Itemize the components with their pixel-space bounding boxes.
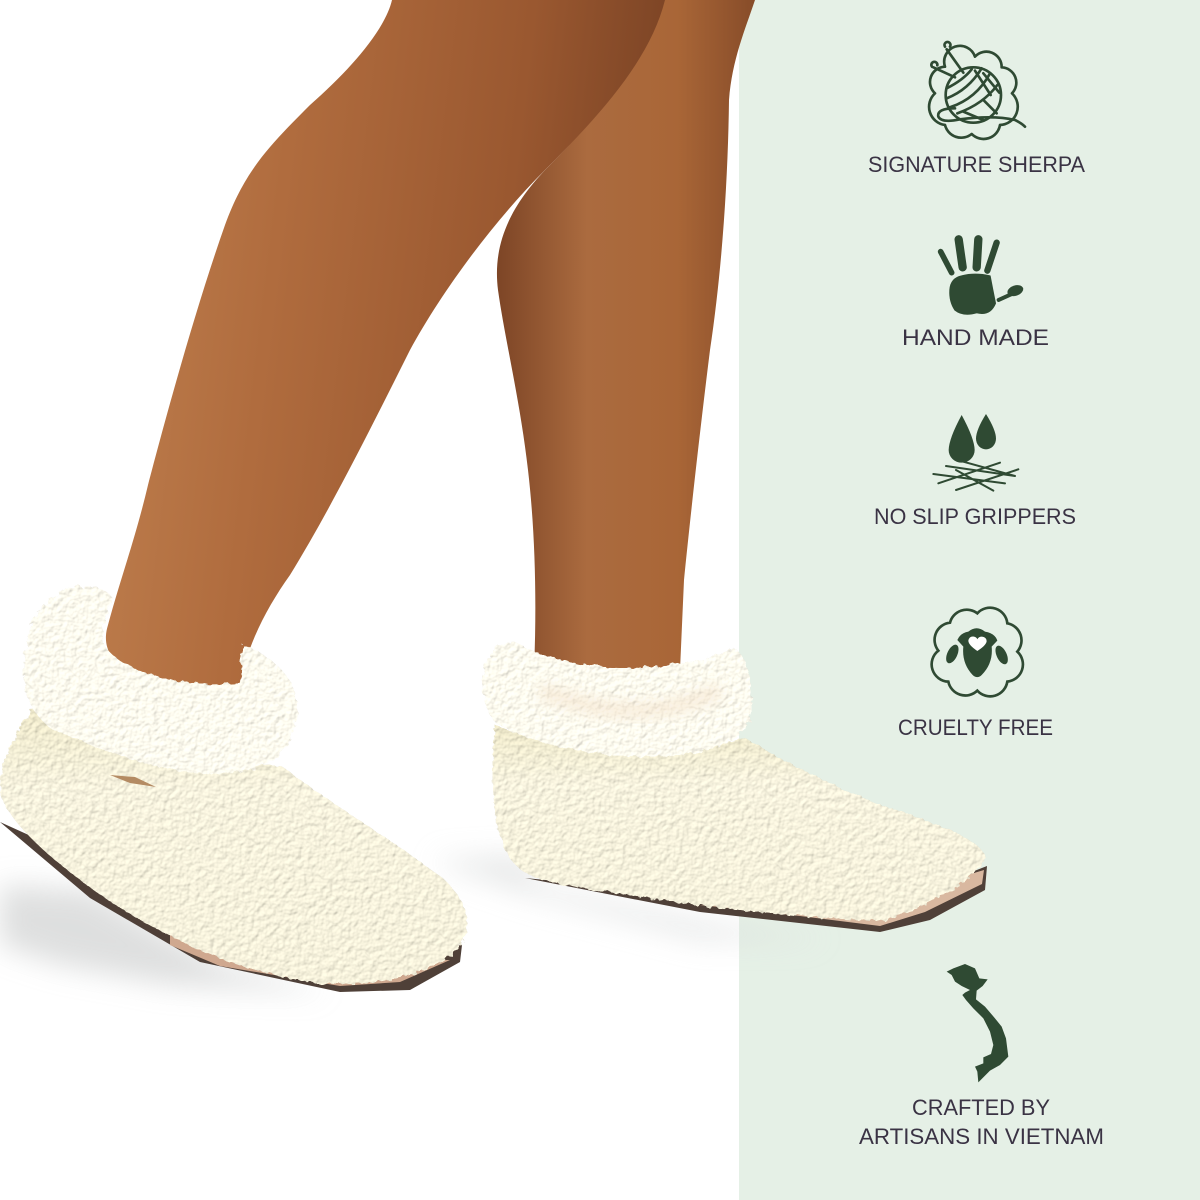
right slipper cuff shading [540, 690, 720, 711]
left slipper sole [0, 822, 462, 992]
right slipper sole [525, 866, 987, 932]
right slipper sole pattern [700, 870, 984, 926]
feature: signature sherpa [868, 42, 1085, 177]
feature: no slip grippers [874, 414, 1076, 529]
floor shadow: right slipper [430, 855, 830, 940]
feature: crafted by artisans in vietnam [859, 964, 1104, 1149]
feature: hand made [902, 239, 1049, 350]
label: cruelty free: CRUELTY FREE [898, 715, 1053, 740]
icon: map of vietnam [947, 964, 1008, 1082]
left slipper cuff [24, 586, 297, 774]
right leg [497, 0, 755, 670]
label: signature sherpa: SIGNATURE SHERPA [868, 152, 1085, 177]
left slipper body [0, 705, 467, 984]
panel: features background [739, 0, 1200, 1200]
left slipper label tag [110, 775, 156, 787]
label: hand made: HAND MADE [902, 325, 1049, 350]
floor shadow: left slipper [0, 885, 330, 992]
right slipper [482, 642, 987, 932]
left leg [106, 0, 665, 688]
right slipper body [492, 725, 986, 921]
label: crafted by artisans in vietnam: ARTISANS IN VIETNAM [859, 1124, 1104, 1149]
left slipper [0, 586, 467, 992]
right slipper cuff [482, 642, 752, 757]
label: crafted by artisans in vietnam [859, 1095, 1104, 1149]
icon: sheep in flower [932, 608, 1023, 696]
left slipper sole pattern [170, 900, 450, 986]
label: no slip grippers: NO SLIP GRIPPERS [874, 504, 1076, 529]
icon: drops and grip mesh [933, 414, 1018, 491]
label: crafted by artisans in vietnam: CRAFTED BY [912, 1095, 1050, 1120]
icon: hand print [941, 239, 1024, 314]
icon: yarn ball [929, 42, 1025, 139]
feature: cruelty free [898, 608, 1053, 740]
